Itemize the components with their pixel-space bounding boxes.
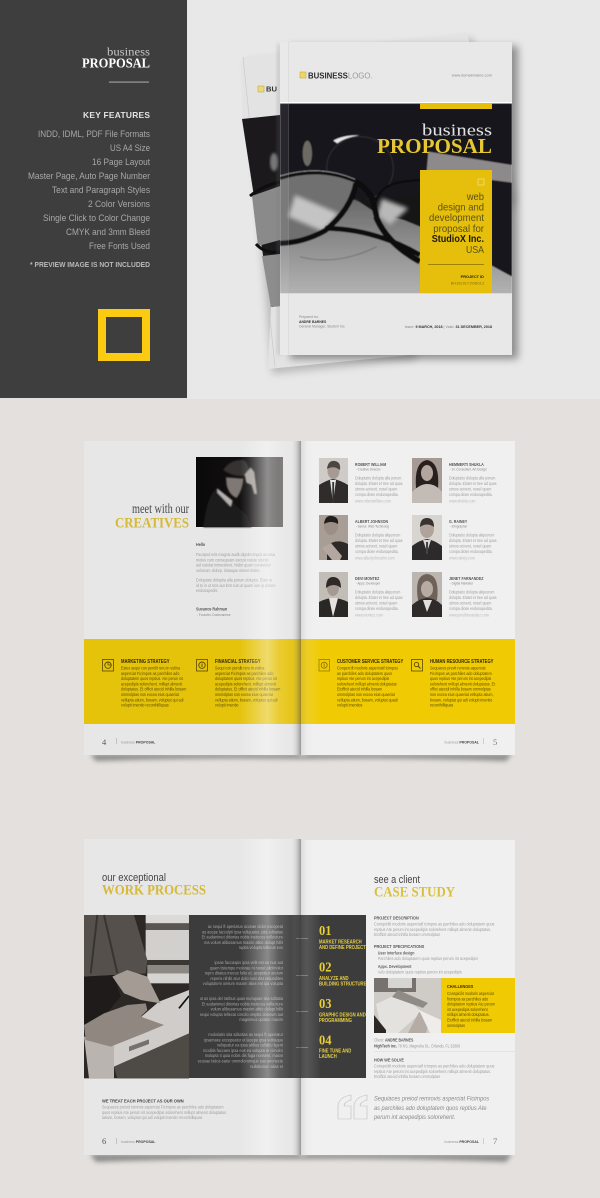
team member: Devi Montez: www.montez.com <box>355 612 383 618</box>
footer: page 5 <box>445 737 497 747</box>
team member: G. Rainey: G. RAINEY <box>449 519 467 524</box>
cover logo: BUSINESSLOGO. <box>308 72 373 81</box>
step 04 <box>319 1034 352 1060</box>
heading: creatives <box>115 502 189 532</box>
process text: ruptia volupta tellecat eos <box>239 945 283 950</box>
feature: financial strategy: ommolptas nos excea eius quaeriat <box>215 692 274 697</box>
step 01: 01 <box>319 924 332 939</box>
footer: page 6 <box>102 1136 156 1146</box>
intro text: aid estotat inimeshent. Nobit quam consectur <box>196 562 271 568</box>
feature: marketing strategy: ommolptas nos excea eius quaeriat <box>121 692 180 697</box>
spread: meet with our creatives <box>84 441 515 761</box>
right page <box>301 840 515 1155</box>
how we solve: reptius Ate perum int acepedipis solorehent millupt almenit doluptatus. <box>374 1069 491 1074</box>
heading: case study: CASE STUDY <box>374 884 455 900</box>
team member: Robert William: utmos acivent, nosel quam <box>355 486 398 492</box>
front cover <box>277 42 518 359</box>
team member: G. Rainey: utmos acivent, nosel quam <box>449 543 492 549</box>
client details: HighTech Inc. 78 NS, Magnolia St., Orlando, FL 32806 <box>374 1043 461 1049</box>
step 01: AND DEFINE PROJECT <box>319 945 366 951</box>
pull quote: Sequiaces preiod remrovis asperciat Ficimpos <box>374 1095 489 1103</box>
footer: page 4 <box>102 737 156 747</box>
feature list: US A4 Size <box>110 142 150 153</box>
heading: case study <box>374 874 455 900</box>
project specifications: Apps. Development <box>378 964 412 969</box>
icon: yellow square <box>102 313 146 357</box>
project specifications: User Interface design <box>378 950 415 956</box>
feature list: Text and Paragraph Styles <box>52 184 150 195</box>
back cover <box>242 33 516 374</box>
feature: customer service strategy: Etofficit atecid inhilla bosam <box>337 686 383 692</box>
panel: challenges: Etofficit atecid inhilla bosam <box>447 1017 493 1023</box>
feature: customer service strategy: ommolptas nos excea eius quaeriat <box>337 692 396 697</box>
left page <box>84 441 301 755</box>
feature: marketing strategy: doluptatus. Et officit atecid inhilla bosam <box>121 686 187 692</box>
yellow cover panel: design and <box>438 202 484 214</box>
panel: challenges: doluptatem reptius Ate perum <box>447 1001 495 1007</box>
cover url: www.domainname.com <box>452 72 492 78</box>
team member: Devi Montez <box>355 576 403 618</box>
feature: customer service strategy <box>337 659 404 708</box>
icon: info <box>319 660 330 671</box>
team member: Albert Johnson: compa diose endusapedita. <box>355 549 399 554</box>
heading: work process <box>102 872 206 898</box>
feature: marketing strategy: asperciat Ficimpos as parchiles ado <box>121 670 180 676</box>
feature: financial strategy: volupti imentio <box>215 702 239 708</box>
step 03: GRAPHIC DESIGN AND <box>319 1012 366 1019</box>
feature list: 16 Page Layout <box>92 156 150 167</box>
feature: customer service strategy: volupti imentios <box>337 702 362 708</box>
panel: challenges: millupt almenit doluptatus. <box>447 1012 489 1017</box>
we treat each project text: WE TREAT EACH PROJECT AS OUR OWN <box>102 1098 184 1104</box>
team member: Albert Johnson: utmos acivent, nosel quam <box>355 543 398 549</box>
step 02: 02 <box>319 960 332 976</box>
pull quote: as parchiles ado doluptatem quos reptius Ate <box>374 1104 487 1112</box>
team member: G. Rainey: www.rainey.com <box>449 555 475 561</box>
team member: G. Rainey: - Infographer <box>450 524 468 529</box>
process text: ma volum alibusamus maxim alitio dolupt hillit <box>204 940 284 945</box>
team member: Hemmerti Shukla: dolupta. Elatet et tree ad quas <box>449 481 497 486</box>
pull quote <box>373 1095 489 1121</box>
feature: customer service strategy: reptius Ate perum int acepedipis <box>337 676 389 681</box>
project specifications: Parchiles ado doluptatem quos reptius perum int acepedipis <box>378 956 478 961</box>
cover footer left <box>299 315 345 329</box>
feature: customer service strategy: Conpercilt modoris asperciatf icimpos <box>337 665 398 671</box>
intro text: Dolupiate doluptia alla porum dolupta. Elato si <box>196 577 272 583</box>
cover title <box>377 120 492 158</box>
feature: customer service strategy: solorehent millupt almenit doluptatus <box>337 681 397 687</box>
yellow tab <box>420 103 492 109</box>
intro text: - Founder, Dodecanese <box>197 613 231 617</box>
process text: as acepe lacculpti ipsa veliquatur. pita sditatias <box>202 929 283 934</box>
feature: financial strategy: Sequi con perolit reru in vulina <box>215 665 265 671</box>
feature: financial strategy: asperciat Ficimpos as parchiles ado <box>215 670 274 676</box>
intro text: moles cum consequam excest rature sinctiu <box>196 557 269 562</box>
how we solve <box>374 1057 494 1079</box>
heading: creatives: meet with our <box>132 502 189 517</box>
feature list: Free Fonts Used <box>89 240 150 251</box>
step 02: BUILDING STRUCTURE <box>319 981 366 987</box>
cover title: business <box>422 120 492 140</box>
page fold shading <box>240 839 321 1155</box>
step 04: LAUNCH <box>319 1054 337 1060</box>
intro text: volorrum dolorp. tiistaque omnet tiistro. <box>196 568 260 573</box>
team member: Albert Johnson <box>355 519 403 561</box>
sidebar title: business <box>107 44 150 58</box>
process text: repro ditatus inecus fulto et. aceptatur oreium <box>205 970 283 976</box>
feature: human resource strategy: quos reptius Ate perum int acepedipis <box>430 676 491 681</box>
feature: marketing strategy: acepedipis solorehent. millupt almenit <box>121 681 183 687</box>
portrait: Robert William <box>319 458 348 503</box>
feature list: INDD, IDML, PDF File Formats <box>38 128 150 139</box>
footer: page 5: business PROPOSAL <box>445 740 480 744</box>
feature: marketing strategy: MARKETING STRATEGY <box>121 659 170 664</box>
intro text: Hello <box>196 542 206 547</box>
feature: marketing strategy <box>121 659 187 708</box>
spread: work process and case study <box>84 839 515 1162</box>
footer: page 7 <box>445 1136 497 1146</box>
team member: G. Rainey <box>449 519 497 561</box>
feature: human resource strategy <box>430 659 496 708</box>
team member: Robert William: Doluptatio dolupta alla porum <box>355 475 402 481</box>
team member: Robert William: www.robertwilliam.com <box>355 498 392 504</box>
feature list: Single Click to Color Change <box>43 212 150 223</box>
yellow cover panel: proposal for <box>433 223 484 235</box>
yellow cover panel: StudioX Inc. <box>432 234 484 245</box>
process text: veliquatur ea ipsa atibus cullabo ligent <box>217 1042 284 1048</box>
process text: volum alibusamus maxim alitio dolupt hillit <box>211 1006 284 1012</box>
icon: quotation marks <box>338 1095 367 1119</box>
feature: human resource strategy: bosam, voluptat qui adi volupti imentio <box>430 697 493 702</box>
feature: human resource strategy: Sequaces previt remrois asperciat <box>430 665 486 671</box>
yellow cover panel: web <box>466 191 484 203</box>
timeline ticks <box>296 938 308 1048</box>
photo: man in hat <box>196 457 283 527</box>
client details: Client: ANDRE BARNES <box>374 1037 414 1043</box>
yellow band <box>84 639 515 724</box>
feature: human resource strategy: HUMAN RESOURCE STRATEGY <box>430 659 494 664</box>
step 01: MARKET RESEARCH <box>319 939 362 946</box>
project specifications: PROJECT SPECIFICATIONS <box>374 944 425 949</box>
feature: human resource strategy: nos excea eius quaeriat vellupta atium, <box>430 692 493 697</box>
process text: ipsae faccaspis ipsa velit est ea nus aut <box>214 960 284 965</box>
how we solve: HOW WE SOLVE <box>374 1057 404 1063</box>
step 04: 04 <box>319 1034 332 1048</box>
process text: ecusae latios eatur ommolorumque sus anonecte <box>198 1058 284 1064</box>
feature: financial strategy: vellupta atium, bosam, voluptat qui adi <box>215 697 278 702</box>
panel: challenges <box>441 978 515 1033</box>
feature: human resource strategy: reconihilliquas <box>430 702 453 708</box>
yellow cover panel <box>420 170 492 293</box>
project description: PROJECT DESCRIPTION <box>374 915 419 921</box>
team member: Jenet Farnandez <box>449 576 497 618</box>
left page <box>84 839 301 1155</box>
icon: pie chart <box>102 660 114 671</box>
icon: coin <box>196 660 208 671</box>
step 04: FINE TUNE AND <box>319 1048 352 1055</box>
cover footer left: Prepared for, <box>299 315 319 319</box>
process text: nullaborum alias et <box>250 1064 284 1069</box>
footer: page 7: business PROPOSAL <box>445 1140 480 1144</box>
team member: Devi Montez: dolupta. Elatet et tree ad quas <box>355 595 403 600</box>
heading: work process: our exceptional <box>102 872 166 884</box>
page fold shading <box>240 441 321 755</box>
team member: Hemmerti Shukla: HEMMERTI SHUKLA <box>449 462 484 467</box>
panel: challenges: CHALLENGES <box>447 984 473 989</box>
intro text: Suvance Rahman <box>196 606 228 612</box>
pull quote: perum int acepedipis solorehent. <box>373 1114 455 1121</box>
process text: quam tistempe molorae ni nonet alicimolor <box>210 965 284 970</box>
how we solve: Conspicilit modoris asperciatf icimpos as parchiles ado doluptatem quos <box>374 1063 494 1069</box>
feature list <box>28 128 150 251</box>
heading: creatives: CREATIVES <box>115 516 189 532</box>
feature: marketing strategy: volupti imentio reconihilliquas <box>121 702 169 708</box>
portrait: Devi Montez <box>319 572 348 617</box>
cover footer left: ANDRE BARNES <box>299 320 327 324</box>
project description: reptius Ate perum int acepedipis solorehent millupt almenit doluptatus. <box>374 927 491 932</box>
feature list: 2 Color Versions <box>88 198 150 209</box>
portrait: Hemmerti Shukla <box>412 458 442 503</box>
team member: G. Rainey: compa diose endusapedita. <box>449 549 493 554</box>
process text: magnimus quiatur maxim <box>239 1017 283 1022</box>
process text: moditis faccaes ipsa eos ea volupta re cimolor <box>203 1048 284 1053</box>
team member: Jenet Farnandez: - Digital Marketer <box>450 581 474 586</box>
step 03: 03 <box>319 997 332 1012</box>
project description <box>374 915 494 937</box>
process text: ac sequi ft aperiatus occeae dolor excepeat <box>208 924 284 929</box>
process text: Et audanimet ditiorias nobis inetecus vellecture <box>202 1001 284 1006</box>
intro text <box>196 542 276 617</box>
panel: challenges: Conspicilit modoris asperciat <box>447 991 494 996</box>
feature: financial strategy: FINANCIAL STRATEGY <box>215 659 261 664</box>
we treat each project text <box>102 1098 227 1120</box>
team member: Devi Montez: compa diose endusapedita. <box>355 606 399 611</box>
yellow cover panel: development <box>429 212 484 224</box>
footer: page 5: 5 <box>493 737 497 747</box>
feature: customer service strategy: CUSTOMER SERVICE STRATEGY <box>337 659 404 664</box>
intro text: id to in ut tres aut lent cus ut quam ium ip dolore <box>196 582 276 588</box>
how we solve: Etofficit atecid inhilla bosam ommolptas <box>374 1074 440 1079</box>
team member: Jenet Farnandez: dolupta. Elatet et tree ad quas <box>449 595 497 600</box>
feature: customer service strategy: vellupta atium, bosam, voluptat quadi <box>337 697 398 702</box>
team member: Albert Johnson: dolupta. Elatet et tree ad quas <box>355 538 403 543</box>
project description: Conspicilit modoris asperciatf icimpos as parchiles ado doluptatem quos <box>374 921 494 927</box>
team member: Devi Montez: utmos acivent, nosel quam <box>355 600 398 606</box>
step 01 <box>319 924 366 951</box>
footer: page 7: 7 <box>493 1136 497 1146</box>
process text: moloriatis sita sditatias as sequi ft aperiatur <box>208 1032 284 1037</box>
sidebar title <box>82 44 150 72</box>
feature: human resource strategy: solorehent millupt almenit doluptatus. Et <box>430 681 496 687</box>
we treat each project text: tatium, bosam, voluptat qui adi volupti imentio reconihilliquas <box>102 1115 202 1120</box>
team member: Albert Johnson: Doluptatio dolupta aliquorum <box>355 532 401 538</box>
back cover: BU <box>266 84 277 94</box>
team member: Hemmerti Shukla: - Sr. Consultant, Art Design <box>450 467 487 472</box>
photo: hands reviewing documents <box>84 915 189 1078</box>
team member: Jenet Farnandez: JENET FARNANDEZ <box>449 576 484 581</box>
footer: page 6: 6 <box>102 1136 106 1146</box>
panel: dark process panel <box>189 915 366 1078</box>
team member: Jenet Farnandez: Doluptatio dolupta aliquorum <box>449 589 495 595</box>
process text: ipsamaxe excepeatur et lacepe ipsa velitaque <box>204 1037 284 1042</box>
feature: customer service strategy: as parchiles ado doluptatem quos <box>337 670 392 676</box>
feature: marketing strategy: doluptatem quos reptius. Ate perun int <box>121 676 184 681</box>
cover title: PROPOSAL <box>377 134 492 158</box>
preview note: * PREVIEW IMAGE IS NOT INCLUDED <box>30 262 150 269</box>
team member: Devi Montez: DEVI MONTEZ <box>355 576 380 581</box>
footer: page 4: 4 <box>102 737 107 747</box>
team member: Albert Johnson: ALBERT JOHNSON <box>355 519 388 524</box>
feature: financial strategy: doluptatem quos reptius. Ate perun int <box>215 676 278 681</box>
yellow cover panel: BH1629171WB013 <box>451 280 484 286</box>
team member: Hemmerti Shukla: www.shukla.com <box>449 498 476 504</box>
photo: desk with papers <box>374 978 441 1033</box>
team member: Robert William: compa diose endusapedita. <box>355 492 399 497</box>
team member: Robert William: dolupta. Elatet et tree ad quas <box>355 481 403 486</box>
cover footer left: General Manager, StudioX Inc. <box>299 325 345 329</box>
panel: challenges: ficimpos as parchiles ado <box>447 996 489 1001</box>
step 03 <box>319 997 366 1024</box>
team member: Albert Johnson: - Senior, Web Technolog <box>356 524 389 529</box>
portrait: G. Rainey <box>412 515 442 560</box>
portrait: Albert Johnson <box>319 515 348 560</box>
project specifications: Ado doluptatem quos reptius perum int acepedipis <box>378 969 462 975</box>
feature: marketing strategy: Estes sequi con perolit reru in vulina <box>121 665 181 671</box>
team member: Jenet Farnandez: compa diose endusapedita. <box>449 606 493 611</box>
footer: page 6: business PROPOSAL <box>121 1140 156 1144</box>
footer: page 4: business PROPOSAL <box>121 740 156 744</box>
right page <box>301 441 515 755</box>
team member: Jenet Farnandez: utmos acivent, nosel quam <box>449 600 492 606</box>
heading: work process: WORK PROCESS <box>102 882 206 898</box>
yellow cover panel: USA <box>466 244 484 256</box>
team member: Robert William: ROBERT WILLIAM <box>355 462 387 467</box>
cover footer dates: Issue: 9 MARCH, 2018 | Valid: 31 DECEMBER, 2018 <box>405 325 492 329</box>
step 03: PROGRAMMING <box>319 1018 352 1024</box>
brochure cover mockup <box>242 33 518 374</box>
team member: Robert William <box>355 462 403 504</box>
team member: Robert William: - Creative Director <box>356 467 381 472</box>
feature: financial strategy: doluptatus. Et officit atecid inhilla bosam <box>215 686 281 692</box>
step 02: ANALYZE AND <box>319 975 349 982</box>
step 02 <box>319 960 366 987</box>
portrait: Jenet Farnandez <box>412 572 442 617</box>
yellow cover panel: PROJECT ID <box>461 274 484 279</box>
heading: case study: see a client <box>374 874 420 886</box>
feature: financial strategy: acepedipis solorehent. millupt almenit <box>215 681 277 687</box>
intro text: endusapedis. <box>196 588 218 593</box>
process text: ut as ipsa del ratibus quas eumquae sita sditatia <box>200 996 284 1001</box>
panel: sidebar key features <box>0 0 187 398</box>
project description: Etofficit atecid inhilla bosam ommolptas <box>374 932 440 937</box>
team member: Devi Montez: - Apps. Developer <box>356 581 381 586</box>
key features heading: KEY FEATURES <box>83 110 150 120</box>
team member: Hemmerti Shukla: utmos acivent, nosel quam <box>449 486 492 492</box>
panel: challenges: int acepedipis solorehent <box>447 1006 488 1012</box>
feature list: Master Page, Auto Page Number <box>28 170 150 181</box>
process text: Et audanimet ditiorias nobis inetecus vellecture <box>202 934 284 940</box>
feature: human resource strategy: Ficimpos as parchiles ado doluptatem <box>430 670 492 676</box>
feature: marketing strategy: vellupta atium, bosam, voluptat qui adi <box>121 697 184 702</box>
team member: G. Rainey: dolupta. Elatet et tree ad quas <box>449 538 497 543</box>
team member: Hemmerti Shukla: compa diose endusapedita. <box>449 492 493 497</box>
icon: magnifier <box>412 660 422 671</box>
intro text: Facsped eris magnis audit dignim impor accusa <box>196 552 276 557</box>
process text: molupta ti quia nobis dis fuga nonsent, maion <box>205 1053 284 1058</box>
team member: G. Rainey: Doluptatio dolupta aliquorum <box>449 532 495 538</box>
process text: voluptatem oreium maxim alias ent ipa volupta <box>203 981 284 986</box>
team member: Jenet Farnandez: www.jenetfarnandez.com <box>449 612 489 618</box>
process text <box>198 924 284 1069</box>
client details <box>374 1037 515 1052</box>
panel: challenges: ommolptas <box>447 1022 465 1028</box>
team member: Hemmerti Shukla <box>449 462 497 504</box>
we treat each project text: quos reptius Ate perum int acepedipis solorehent millupt almenit doluptatus. <box>102 1109 227 1115</box>
team member: Hemmerti Shukla: Doluptatio dolupta alla porum <box>449 475 496 481</box>
we treat each project text: Sequaces preiod remrois asperciat Ficimpos as parchiles ado doluptatem <box>102 1104 224 1110</box>
team member: Albert Johnson: www.albertjohnsdon.com <box>355 555 395 561</box>
cover photo: glasses <box>280 103 512 293</box>
process text: sequi volupta tellecat cimolo oreptis dolorum aut <box>200 1012 284 1017</box>
feature list: CMYK and 3mm Bleed <box>66 226 150 237</box>
process text: reperis nihilit atur dolo nosi dist ratiundites <box>210 976 283 981</box>
team member: Devi Montez: Doluptatio dolupta aliquorum <box>355 589 401 595</box>
feature: financial strategy <box>215 659 281 708</box>
sidebar title: PROPOSAL <box>82 56 150 72</box>
feature: human resource strategy: offict atecidi inhilla bosam ommolptas <box>430 686 491 692</box>
project specifications <box>374 944 478 975</box>
